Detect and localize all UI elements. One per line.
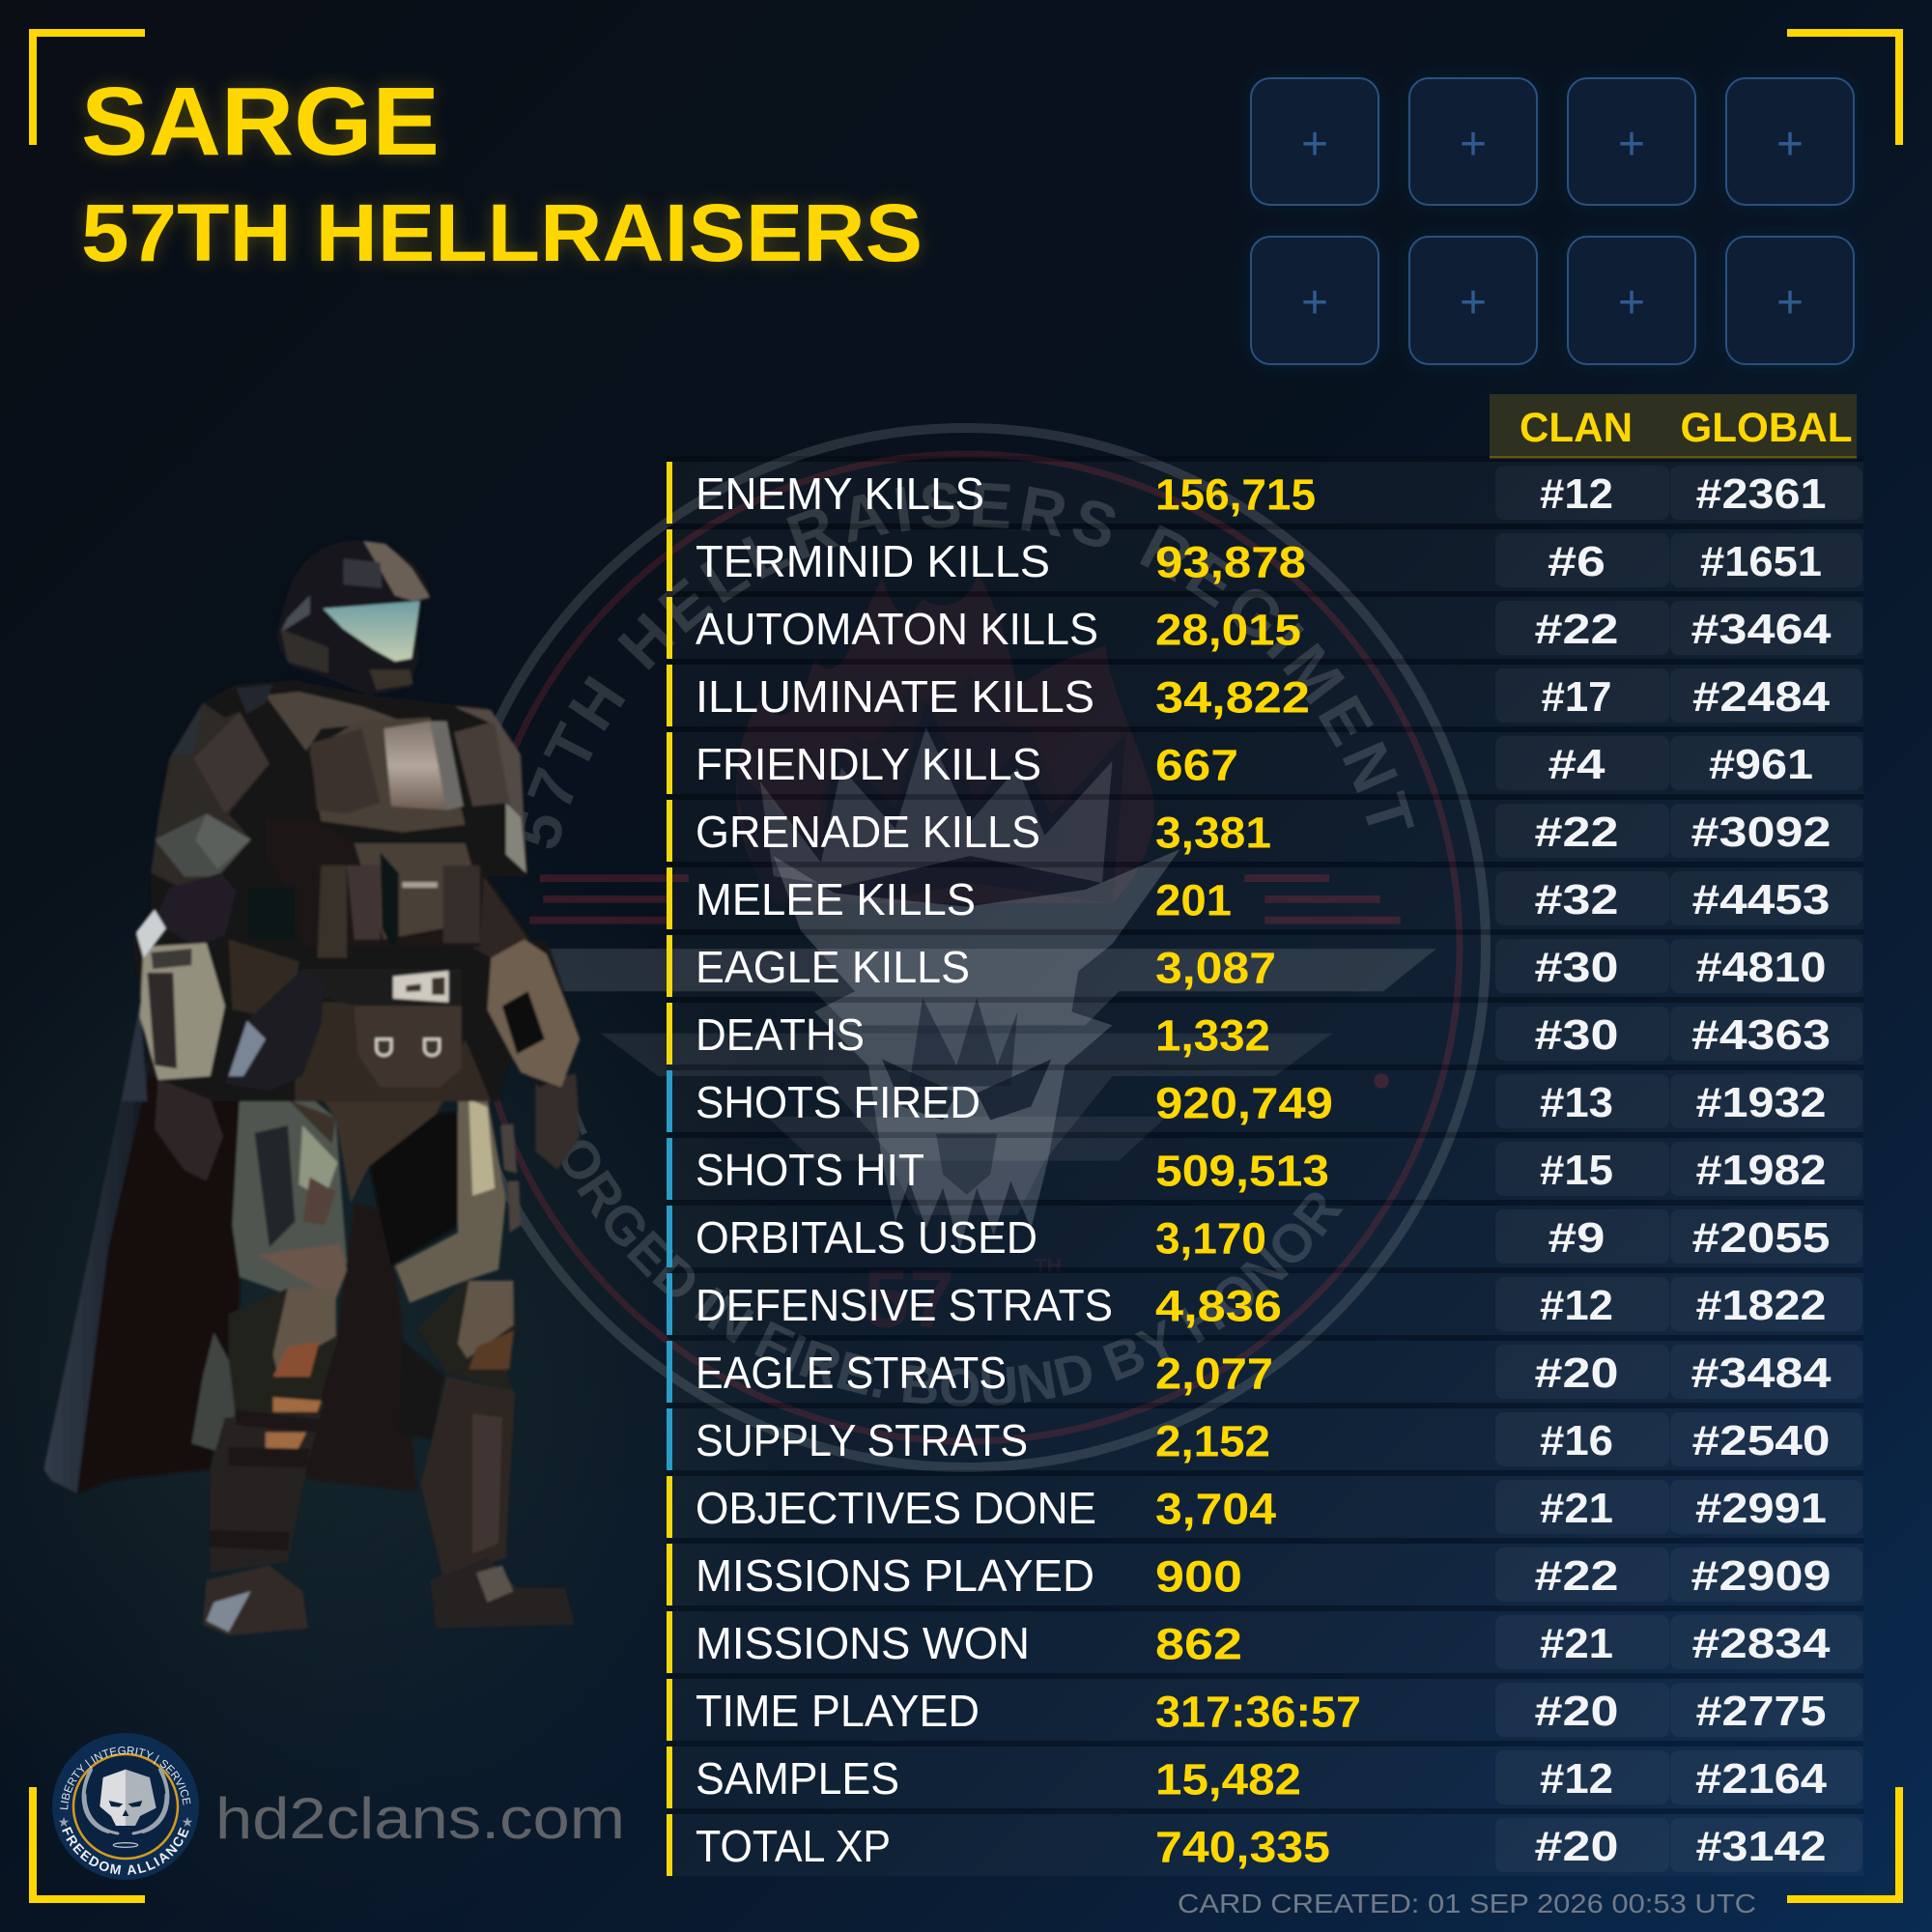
- row: friendly kills: FRIENDLY KILLS: [696, 739, 1041, 789]
- title: player name and clan: SARGE: [81, 68, 440, 176]
- row: objectives done: [667, 1470, 1863, 1538]
- row: missions won: 862: [1155, 1619, 1242, 1669]
- slot 3: +: [1618, 119, 1645, 170]
- row: missions won: [667, 1605, 1863, 1673]
- row: total xp: TOTAL XP: [696, 1821, 891, 1871]
- row: orbitals used: [667, 1200, 1863, 1267]
- row: eagle strats: 2,077: [1155, 1349, 1273, 1399]
- title: player name and clan: [81, 68, 923, 278]
- row: shots fired: 920,749: [1155, 1078, 1333, 1128]
- row: missions won: #2834: [1692, 1620, 1831, 1667]
- skull: [99, 1770, 156, 1847]
- row: supply strats: #2540: [1692, 1417, 1830, 1464]
- row: samples: 15,482: [1155, 1754, 1301, 1804]
- row: defensive strats: 4,836: [1155, 1281, 1282, 1331]
- row: terminid kills: 93,878: [1155, 537, 1306, 587]
- row: samples: #2164: [1695, 1755, 1828, 1803]
- row: automaton kills: AUTOMATON KILLS: [696, 604, 1098, 654]
- badge: Freedom Alliance logo: LIBERTY | INTEGRITY | SERVICE: [60, 1747, 191, 1810]
- watermark emblem: 57th Hellraisers Regiment: [493, 423, 1491, 1472]
- corner bracket: bottom right: [1787, 1787, 1903, 1903]
- slot 7: [1568, 237, 1695, 364]
- row: missions played: 900: [1155, 1551, 1242, 1602]
- row: shots hit: SHOTS HIT: [696, 1145, 924, 1195]
- row: illuminate kills: #2484: [1692, 673, 1831, 721]
- watermark emblem: 57th Hellraisers Regiment: 57TH HELLRAISERS REGIMENT: [524, 483, 1414, 848]
- row: total xp: #20: [1534, 1823, 1619, 1870]
- row: eagle strats: #3484: [1690, 1350, 1832, 1397]
- row: shots fired: SHOTS FIRED: [696, 1077, 980, 1127]
- row: automaton kills: #22: [1534, 606, 1619, 653]
- row: friendly kills: #961: [1709, 741, 1813, 788]
- row: orbitals used: #9: [1548, 1214, 1605, 1262]
- row: shots fired: [667, 1065, 1863, 1132]
- corner bracket: top left: [29, 29, 145, 145]
- slot 2: +: [1460, 119, 1487, 170]
- row: shots hit: 509,513: [1155, 1146, 1329, 1196]
- slot 7: +: [1618, 277, 1645, 328]
- row: missions won: MISSIONS WON: [696, 1618, 1030, 1668]
- lower body: cape, legs and boots: [43, 1063, 580, 1635]
- row: terminid kills: #6: [1548, 538, 1605, 585]
- loadout slots grid: [1250, 77, 1855, 365]
- row: terminid kills: TERMINID KILLS: [696, 536, 1050, 586]
- row: friendly kills: 667: [1155, 740, 1238, 790]
- row: total xp: 740,335: [1155, 1822, 1330, 1872]
- row: orbitals used: #2055: [1692, 1214, 1830, 1262]
- row: deaths: DEATHS: [696, 1009, 865, 1060]
- flames: [736, 571, 1154, 903]
- row: melee kills: #4453: [1692, 876, 1830, 923]
- row: missions played: MISSIONS PLAYED: [696, 1550, 1094, 1601]
- row: supply strats: #16: [1540, 1417, 1613, 1464]
- row: deaths: #30: [1534, 1011, 1619, 1059]
- laurels: [84, 1770, 167, 1833]
- row: enemy kills: [667, 456, 1863, 524]
- row: samples: [667, 1741, 1863, 1808]
- row: enemy kills: #2361: [1696, 470, 1826, 518]
- corner bracket: top right: [1787, 29, 1903, 145]
- row: shots hit: #1982: [1696, 1147, 1826, 1194]
- row: eagle kills: 3,087: [1155, 943, 1276, 993]
- slot 8: +: [1776, 277, 1804, 328]
- slot 8: [1726, 237, 1854, 364]
- row: terminid kills: [667, 524, 1863, 591]
- row: eagle strats: EAGLE STRATS: [696, 1348, 1007, 1398]
- row: time played: [667, 1673, 1863, 1741]
- row: enemy kills: #12: [1540, 470, 1613, 518]
- row: illuminate kills: #17: [1542, 673, 1611, 721]
- row: enemy kills: 156,715: [1155, 469, 1316, 520]
- demon skull: [774, 849, 1180, 1249]
- row: orbitals used: ORBITALS USED: [696, 1212, 1037, 1263]
- row: defensive strats: #1822: [1696, 1282, 1826, 1329]
- row: eagle strats: #20: [1534, 1350, 1619, 1397]
- row: samples: #12: [1540, 1755, 1613, 1803]
- row: objectives done: #21: [1540, 1485, 1613, 1532]
- slot 4: +: [1776, 119, 1804, 170]
- row: friendly kills: [667, 726, 1863, 794]
- row: orbitals used: 3,170: [1155, 1213, 1266, 1264]
- badge: Freedom Alliance logo: FREEDOM ALLIANCE: [62, 1827, 189, 1875]
- row: melee kills: 201: [1155, 875, 1232, 925]
- row: terminid kills: #1651: [1700, 538, 1822, 585]
- badge: Freedom Alliance logo: [52, 1733, 199, 1880]
- row: total xp: #3142: [1696, 1823, 1826, 1870]
- site name: hd2clans.com: [215, 1786, 625, 1851]
- helmet: [277, 540, 430, 696]
- upper body: helmet, torso and arms: [122, 540, 580, 1101]
- row: eagle strats: [667, 1335, 1863, 1403]
- row: time played: #20: [1534, 1688, 1619, 1735]
- watermark emblem: 57th Hellraisers Regiment: TH: [1035, 1255, 1062, 1277]
- row: defensive strats: #12: [1540, 1282, 1613, 1329]
- row: defensive strats: [667, 1267, 1863, 1335]
- row: total xp: [667, 1808, 1863, 1876]
- row: eagle kills: #30: [1534, 944, 1619, 991]
- row: eagle kills: EAGLE KILLS: [696, 942, 970, 992]
- row: time played: 317:36:57: [1155, 1687, 1361, 1737]
- badge: Freedom Alliance logo: ★: [58, 1814, 70, 1830]
- row: automaton kills: #3464: [1690, 606, 1832, 653]
- rank column headers: GLOBAL: [1681, 405, 1853, 451]
- row: automaton kills: 28,015: [1155, 605, 1301, 655]
- slot 4: [1726, 78, 1854, 205]
- row: grenade kills: 3,381: [1155, 808, 1271, 858]
- card created timestamp: CARD CREATED: 01 SEP 2026 00:53 UTC: [1178, 1889, 1756, 1918]
- rank column headers: CLAN: [1520, 405, 1633, 451]
- row: deaths: #4363: [1691, 1011, 1831, 1059]
- row: objectives done: 3,704: [1155, 1484, 1276, 1534]
- row: deaths: [667, 997, 1863, 1065]
- row: melee kills: MELEE KILLS: [696, 874, 976, 924]
- watermark emblem: 57th Hellraisers Regiment: 57: [864, 1254, 954, 1345]
- row: illuminate kills: [667, 659, 1863, 726]
- row: melee kills: #32: [1534, 876, 1619, 923]
- corner bracket: bottom left: [29, 1787, 145, 1903]
- row: time played: #2775: [1696, 1688, 1826, 1735]
- row: eagle kills: [667, 929, 1863, 997]
- slot 5: [1251, 237, 1378, 364]
- row: grenade kills: #3092: [1690, 809, 1832, 856]
- row: enemy kills: ENEMY KILLS: [696, 469, 984, 519]
- row: grenade kills: #22: [1534, 809, 1619, 856]
- row: missions played: #2909: [1690, 1552, 1832, 1600]
- row: eagle kills: #4810: [1696, 944, 1826, 991]
- row: missions played: #22: [1534, 1552, 1619, 1600]
- character: armored helldiver with cape: [43, 540, 580, 1635]
- row: missions won: #21: [1540, 1620, 1613, 1667]
- stats table: [667, 456, 1863, 1876]
- row: objectives done: OBJECTIVES DONE: [696, 1483, 1096, 1533]
- row: missions played: [667, 1538, 1863, 1605]
- row: shots fired: #13: [1540, 1079, 1613, 1126]
- clan name: 57TH HELLRAISERS: [81, 187, 923, 278]
- slot 6: [1409, 237, 1537, 364]
- row: time played: TIME PLAYED: [696, 1686, 980, 1736]
- row: supply strats: 2,152: [1155, 1416, 1270, 1466]
- watermark emblem: 57th Hellraisers Regiment: FORGED IN FIRE. BOUND BY HONOR: [562, 1112, 1343, 1406]
- row: grenade kills: [667, 794, 1863, 862]
- row: illuminate kills: 34,822: [1155, 672, 1310, 723]
- slot 1: [1251, 78, 1378, 205]
- row: objectives done: #2991: [1695, 1485, 1827, 1532]
- row: samples: SAMPLES: [696, 1753, 899, 1804]
- slot 3: [1568, 78, 1695, 205]
- row: supply strats: [667, 1403, 1863, 1470]
- row: defensive strats: DEFENSIVE STRATS: [696, 1280, 1113, 1330]
- row: illuminate kills: ILLUMINATE KILLS: [696, 671, 1094, 722]
- row: supply strats: SUPPLY STRATS: [696, 1415, 1028, 1465]
- row: automaton kills: [667, 591, 1863, 659]
- slot 1: +: [1301, 119, 1328, 170]
- row: melee kills: [667, 862, 1863, 929]
- slot 6: +: [1460, 277, 1487, 328]
- row: shots hit: #15: [1540, 1147, 1613, 1194]
- slot 5: +: [1301, 277, 1328, 328]
- title: player name and clan: 57TH HELLRAISERS: [81, 187, 923, 278]
- row: friendly kills: #4: [1548, 741, 1605, 788]
- crown: [733, 700, 1126, 910]
- player name: SARGE: [81, 68, 440, 176]
- row: deaths: 1,332: [1155, 1010, 1270, 1061]
- row: shots hit: [667, 1132, 1863, 1200]
- rank column headers: [1490, 394, 1857, 458]
- row: shots fired: #1932: [1696, 1079, 1826, 1126]
- row: grenade kills: GRENADE KILLS: [696, 807, 1040, 857]
- badge: Freedom Alliance logo: ★: [182, 1814, 193, 1830]
- slot 2: [1409, 78, 1537, 205]
